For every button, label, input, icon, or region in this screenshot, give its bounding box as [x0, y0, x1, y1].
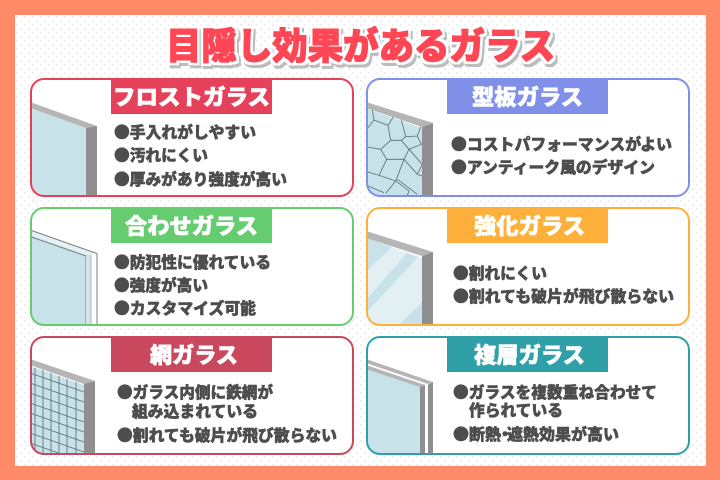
feature list: tempered glass	[453, 260, 674, 307]
feature list: patterned glass: ●コストパフォーマンスがよい	[451, 131, 672, 155]
heading: tempered glass	[447, 207, 608, 243]
feature list: multilayer glass: 作られている	[469, 397, 563, 421]
heading: frost glass: フロストガラス	[113, 80, 270, 112]
icon: laminated glass pane	[30, 230, 97, 326]
icon: patterned glass pane	[366, 102, 433, 197]
feature list: wired glass: ●割れても破片が飛び散らない	[117, 422, 337, 446]
panel: patterned glass	[366, 78, 690, 197]
feature list: frost glass: ●汚れにくい	[114, 142, 208, 166]
feature list: multilayer glass: ●ガラスを複数重ね合わせて	[453, 379, 657, 403]
heading: tempered glass: 強化ガラス	[474, 209, 585, 241]
feature list: multilayer glass: ・	[497, 421, 513, 445]
panel: tempered glass	[366, 207, 690, 326]
heading: multilayer glass	[447, 336, 608, 372]
heading: patterned glass: 型板ガラス	[472, 80, 583, 112]
feature list: laminated glass	[114, 249, 271, 319]
heading: wired glass: 網ガラス	[150, 338, 238, 370]
icon: wired glass pane	[30, 360, 95, 455]
feature list: wired glass: 組み込まれている	[132, 398, 258, 422]
icon: frost glass pane	[30, 102, 97, 197]
feature list: tempered glass: ●割れても破片が飛び散らない	[453, 283, 674, 307]
heading: patterned glass	[447, 78, 608, 114]
feature list: laminated glass: ●防犯性に優れている	[114, 249, 271, 273]
icon: multilayer glass pane	[366, 359, 433, 455]
panel: wired glass	[30, 336, 354, 455]
feature list: patterned glass: ●アンティーク風のデザイン	[451, 154, 655, 178]
heading: wired glass	[111, 336, 272, 372]
icon: tempered glass pane	[366, 231, 433, 326]
panel: multilayer glass	[366, 336, 690, 455]
title: 目隠し効果があるガラス	[166, 16, 555, 70]
feature list: wired glass: ●ガラス内側に鉄網が	[117, 379, 273, 403]
feature list: tempered glass: ●割れにくい	[453, 260, 547, 284]
panel: laminated glass	[30, 207, 354, 326]
feature list: multilayer glass: 遮熱効果が高い	[507, 421, 619, 445]
heading: laminated glass: 合わせガラス	[125, 209, 258, 241]
feature list: patterned glass	[451, 131, 672, 178]
feature list: frost glass: ●手入れがしやすい	[114, 119, 256, 143]
feature list: frost glass: ●厚みがあり強度が高い	[114, 166, 287, 190]
heading: multilayer glass: 複層ガラス	[474, 338, 585, 370]
feature list: laminated glass: ●カスタマイズ可能	[114, 295, 256, 319]
panel: frost glass	[30, 78, 354, 197]
feature list: multilayer glass: ●断熱	[453, 421, 501, 445]
feature list: frost glass	[114, 119, 287, 190]
feature list: multilayer glass	[453, 379, 657, 445]
feature list: laminated glass: ●強度が高い	[114, 272, 208, 296]
feature list: wired glass	[117, 379, 337, 446]
